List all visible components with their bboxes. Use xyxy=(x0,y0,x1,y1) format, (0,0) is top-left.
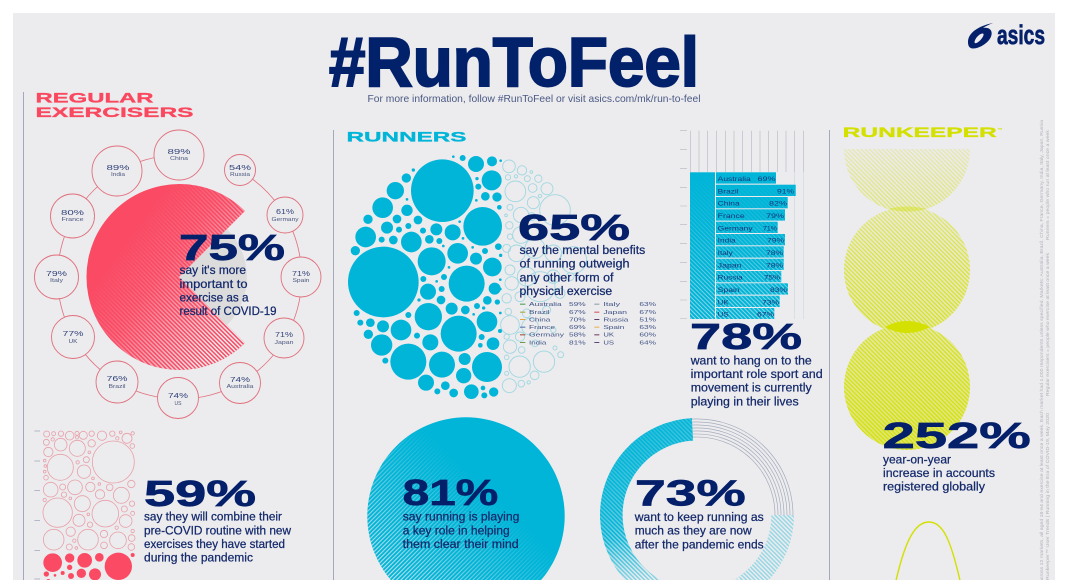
bar labels: 91% xyxy=(777,189,795,195)
heading: runkeeper: RUNKEEPER xyxy=(843,124,997,140)
country circle: France xyxy=(50,194,94,238)
bar labels: 75% xyxy=(764,276,781,282)
stat: 59%: pre-COVID routine with new xyxy=(144,523,291,537)
bar labels: 78% xyxy=(766,251,784,257)
bar labels: 69% xyxy=(758,177,776,183)
stat: 59% xyxy=(144,473,291,565)
stat: 65%: say the mental benefits xyxy=(520,243,645,257)
legend: country values for 65% xyxy=(520,302,656,346)
stat: 75%: 75% xyxy=(179,227,285,268)
country circle: Germany xyxy=(267,197,303,233)
country circle: US: 74% xyxy=(168,393,188,400)
legend: country values for 65%: Germany xyxy=(529,333,564,339)
stat: 73%: want to keep running as xyxy=(634,510,764,524)
bar labels: 82% xyxy=(769,202,788,208)
country circle: US: US xyxy=(174,401,182,407)
chart: 59% bubble column xyxy=(34,431,135,580)
legend: country values for 65%: 63% xyxy=(639,325,656,331)
stat: 65%: any other form of xyxy=(520,270,614,284)
legend: country values for 65%: 59% xyxy=(569,302,586,308)
heading: runkeeper xyxy=(843,124,1002,140)
country circle: India xyxy=(92,146,142,196)
stat: 65% xyxy=(518,207,645,298)
bar labels: Spain xyxy=(718,288,740,294)
country circle: Germany: Germany xyxy=(272,217,299,223)
country circle: Spain: 71% xyxy=(292,271,310,278)
country circle: Japan: 71% xyxy=(275,332,293,339)
legend: country values for 65%: US xyxy=(603,340,614,346)
bar labels: 67% xyxy=(757,313,775,319)
country circle: Italy xyxy=(34,255,78,299)
stat: 252%: year-on-year xyxy=(883,452,951,466)
column divider: right xyxy=(829,130,830,580)
stat: 78%: 78% xyxy=(690,316,802,357)
country circle: US xyxy=(158,378,198,418)
stat: 81%: say running is playing xyxy=(403,510,519,524)
country circle: Italy: Italy xyxy=(50,278,64,284)
stat: 73%: much as they are now xyxy=(635,524,752,538)
footnote: rotated source text: Regular exercisers = people who exercise at least once a week xyxy=(1045,252,1050,396)
footnote: rotated source text: Runkeeper™ User Trends | Running in the Era of COVID-19, May 2020 xyxy=(1045,412,1050,580)
stat: 252%: 252% xyxy=(883,415,1031,456)
legend: country values for 65%: 60% xyxy=(639,333,656,339)
chart: runkeeper stacked circles xyxy=(840,145,975,455)
stat: 252%: increase in accounts xyxy=(883,466,995,480)
legend: country values for 65%: 51% xyxy=(639,317,656,323)
country circle: China: 89% xyxy=(168,149,190,156)
column divider: centre xyxy=(333,130,334,580)
bar labels: Russia xyxy=(718,276,744,282)
bar labels: Italy xyxy=(718,251,733,257)
chart: 65% bubble cluster xyxy=(348,155,587,399)
legend: country values for 65%: China xyxy=(529,317,552,323)
bar labels: China xyxy=(718,202,741,208)
chart: 78% bar chart xyxy=(680,131,805,322)
chart: 73% ring xyxy=(600,418,794,580)
bar labels: UK xyxy=(718,300,729,306)
legend: country values for 65%: 70% xyxy=(569,317,586,323)
stat: 78%: want to hang on to the xyxy=(690,353,812,367)
stat: 59%: 59% xyxy=(144,473,256,514)
stat: 252% xyxy=(883,415,1031,494)
country circle: China: China xyxy=(170,156,188,162)
legend: country values for 65%: Brazil xyxy=(529,310,550,316)
subtitle: For more information, follow #RunToFeel or visit asics.com/mk/run-to-feel xyxy=(368,93,700,105)
legend: country values for 65%: 64% xyxy=(639,340,656,346)
title: #RunToFeel xyxy=(329,23,699,101)
stat: 78%: movement is currently xyxy=(691,381,812,395)
chart: 81% circle xyxy=(367,417,565,580)
country circle: Spain xyxy=(281,257,321,297)
stat: 81%: them clear their mind xyxy=(403,537,519,551)
stat: 252%: registered globally xyxy=(883,480,986,494)
country circle: Australia: Australia xyxy=(226,384,254,390)
stat: 75%: say it's more xyxy=(180,263,246,277)
stat: 81%: a key role in helping xyxy=(403,523,510,537)
country circle: Russia xyxy=(224,154,256,186)
bars xyxy=(716,172,796,319)
stat: 59%: during the pandemic xyxy=(144,551,253,565)
legend: country values for 65%: 67% xyxy=(639,310,656,316)
country circle: India: 89% xyxy=(106,165,130,172)
bar labels: India xyxy=(718,239,737,245)
chart: lime arch xyxy=(895,522,961,580)
country circle: France: France xyxy=(62,217,84,223)
legend: country values for 65%: 67% xyxy=(569,310,586,316)
logo: asics xyxy=(968,20,1045,50)
country circle: Brazil: Brazil xyxy=(108,384,126,390)
pie: 75% xyxy=(80,180,250,375)
bar labels: 78% xyxy=(766,263,784,269)
stat: 75% xyxy=(179,227,285,318)
stat: 65%: of running outweigh xyxy=(520,257,630,271)
heading: regular exercisers xyxy=(36,90,194,120)
heading: runners: RUNNERS xyxy=(346,129,466,145)
footnote: rotated source text xyxy=(1039,119,1050,580)
legend: country values for 65%: Italy xyxy=(603,302,620,308)
legend: country values for 65%: Spain xyxy=(603,325,624,331)
stat: 73%: 73% xyxy=(635,473,746,514)
country circle: Japan: Japan xyxy=(274,340,294,346)
country circle: Brazil: 76% xyxy=(106,376,128,383)
footnote: rotated source text: Runners = people who run at least once a week xyxy=(1045,129,1050,240)
bar labels: 73% xyxy=(762,300,780,306)
country circle: UK: 77% xyxy=(62,331,84,338)
stat: 65%: physical exercise xyxy=(520,284,612,298)
country circle: Japan xyxy=(264,318,304,358)
stat: 78% xyxy=(690,316,823,408)
bar labels: Australia xyxy=(718,177,752,183)
country circle: Brazil xyxy=(96,361,138,403)
stat: 75%: result of COVID-19 xyxy=(180,304,277,318)
logo: asics: asics xyxy=(997,20,1045,50)
stat: 78%: playing in their lives xyxy=(691,394,799,408)
bar labels: 79% xyxy=(767,239,785,245)
country circle: Australia: 74% xyxy=(230,377,250,384)
stat: 73% xyxy=(634,473,764,551)
stat: 65%: 65% xyxy=(518,207,630,248)
stat: 59%: exercises they have started xyxy=(144,537,285,551)
heading: regular exercisers: EXERCISERS xyxy=(36,104,194,120)
country circle: Australia xyxy=(220,362,260,404)
bar labels: Germany xyxy=(718,226,753,232)
stat: 75%: important to xyxy=(180,277,248,291)
legend: country values for 65%: 58% xyxy=(569,333,586,339)
heading: runkeeper: ™ xyxy=(998,128,1002,134)
country circle: UK: UK xyxy=(68,339,78,345)
country circle: Italy: 79% xyxy=(46,271,67,278)
stat: 81%: 81% xyxy=(403,472,498,513)
legend: country values for 65%: Russia xyxy=(603,317,630,323)
chart: 75% country ring and pie xyxy=(34,130,321,418)
legend: country values for 65%: France xyxy=(529,325,555,331)
legend: country values for 65%: 81% xyxy=(569,340,586,346)
bar labels: 71% xyxy=(763,226,778,232)
stat: 81% xyxy=(403,472,519,551)
legend: country values for 65%: India xyxy=(529,340,548,346)
legend: country values for 65%: Australia xyxy=(529,302,563,308)
bar labels: 79% xyxy=(766,214,785,220)
bar labels: Japan xyxy=(718,263,742,269)
heading: regular exercisers: REGULAR xyxy=(36,90,154,106)
legend: country values for 65%: 69% xyxy=(569,325,586,331)
stat: 75%: exercise as a xyxy=(180,290,249,304)
stat: 59%: say they will combine their xyxy=(144,510,282,524)
bar labels: France xyxy=(718,214,746,220)
legend: country values for 65%: UK xyxy=(603,333,614,339)
country circle: China xyxy=(154,130,204,180)
country circle: India: India xyxy=(111,172,125,178)
legend: country values for 65%: Japan xyxy=(603,310,627,316)
footnote: rotated source text: across 12 markets, all aged 18-64 and exercise at least once a week. Each market had 1,000 respondents unless specified. Markets: Australia, Brazil, China, France, Germany, India, Italy, Japan, Russia xyxy=(1039,119,1044,580)
bar labels: 83% xyxy=(770,288,788,294)
column divider: left xyxy=(23,92,24,580)
country circle: France: 80% xyxy=(61,210,84,217)
stat: 73%: after the pandemic ends xyxy=(635,537,764,551)
bar labels xyxy=(718,177,795,319)
country circle: Russia: Russia xyxy=(230,172,250,178)
bar labels: Brazil xyxy=(718,189,739,195)
country circle: UK xyxy=(52,316,94,358)
bar labels: US xyxy=(718,313,729,319)
legend: country values for 65%: 63% xyxy=(639,302,656,308)
stat: 78%: important role sport and xyxy=(691,367,823,381)
country circle: Germany: 61% xyxy=(276,209,294,216)
country circle: Spain: Spain xyxy=(292,278,310,284)
country circle: Russia: 54% xyxy=(229,165,251,172)
